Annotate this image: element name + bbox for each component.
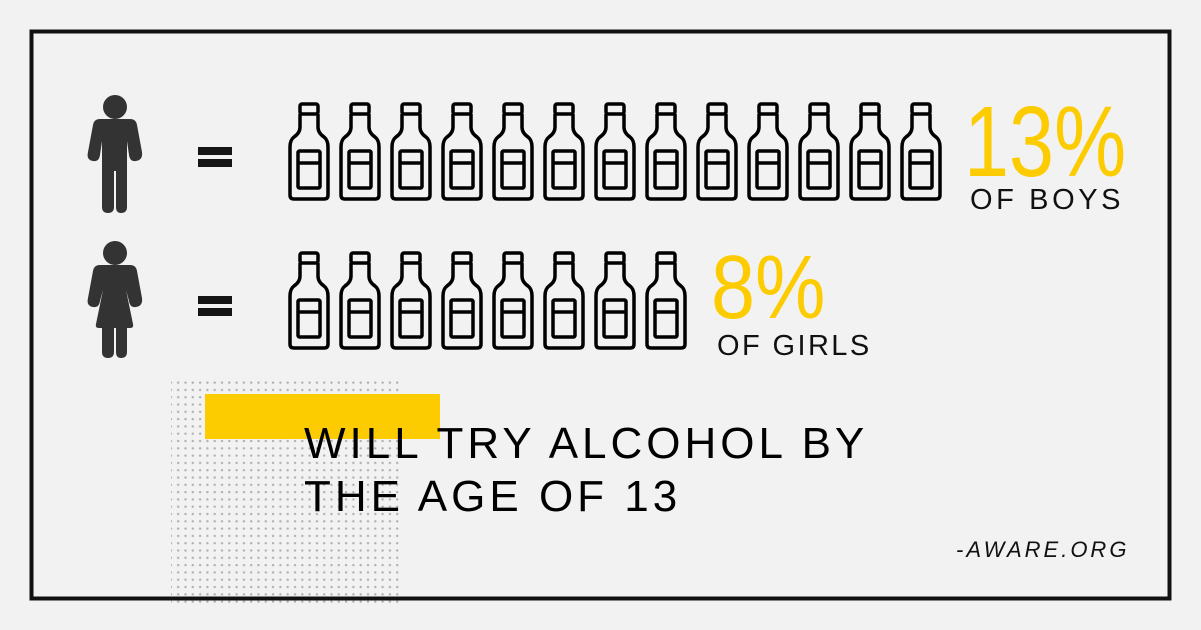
headline text [304,419,868,521]
icon: female figure [88,241,142,358]
dotted background pattern [171,378,403,606]
label: of girls: OF GIRLS [717,330,872,362]
icon: equals sign boys [198,147,232,167]
yellow highlight bar [205,394,440,439]
icon: male figure [88,95,142,213]
headline text: WILL TRY ALCOHOL BY [304,419,868,468]
icon: equals sign girls [198,296,232,316]
stat: 13%: 13% [964,86,1126,198]
bottles: boys row [290,104,940,199]
source credit: -AWARE.ORG [956,537,1129,562]
stat: 8%: 8% [711,238,825,338]
label: of boys: OF BOYS [970,184,1124,216]
bottles: girls row [290,253,685,348]
headline text: THE AGE OF 13 [304,472,681,521]
